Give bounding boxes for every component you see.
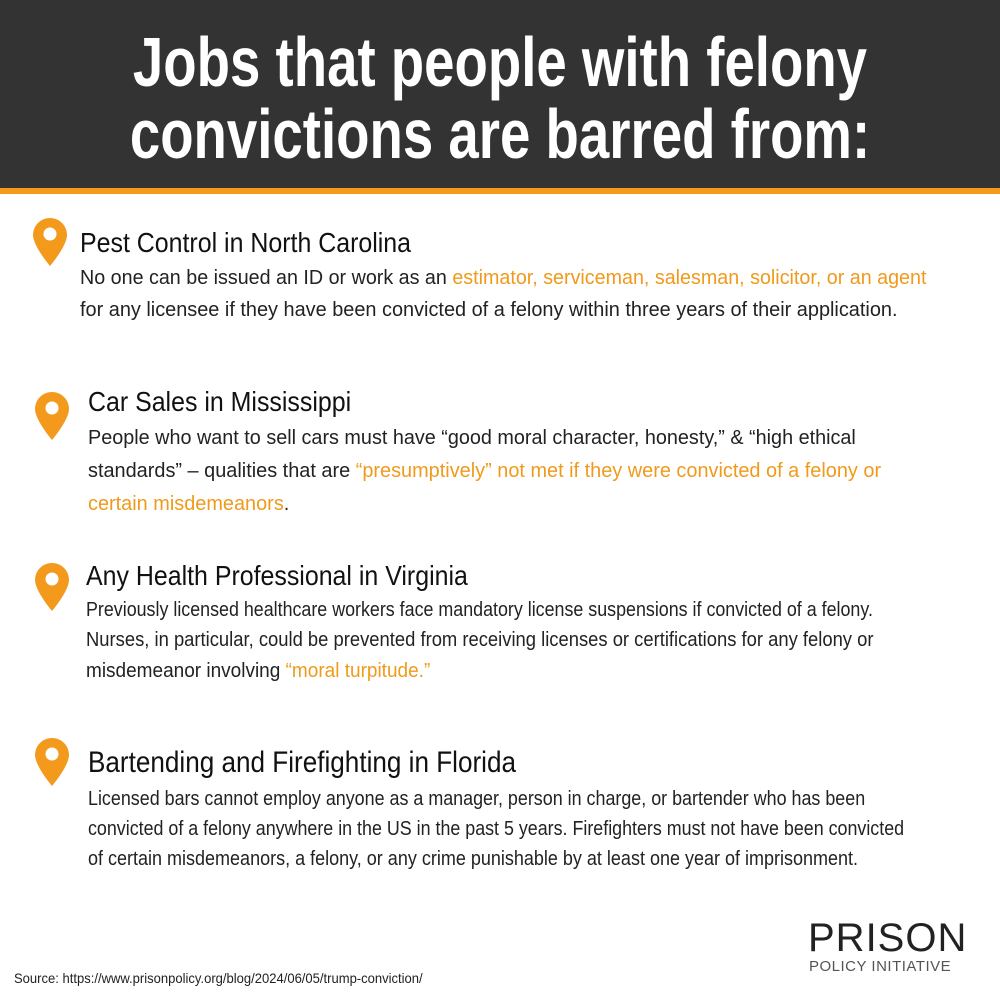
logo: POLICY INITIATIVE (809, 958, 951, 975)
item: car sales: standards” – qualities that are “presumptively” not met if they were convicted of a felony or (88, 460, 881, 482)
item: health professional: Nurses, in particular, could be prevented from receiving licenses or certifications for any felony or (86, 629, 873, 651)
title: Jobs that people with felony (133, 23, 867, 101)
text: No one can be issued an ID or work as an estimator, serviceman, salesman, solicitor, or an agent (80, 267, 926, 289)
heading: Bartending and Firefighting in Florida (88, 746, 516, 779)
item: car sales (35, 386, 881, 515)
source: Source: https://www.prisonpolicy.org/blog/2024/06/05/trump-conviction/ (14, 970, 423, 986)
orange stripe (0, 188, 1000, 194)
title (130, 23, 870, 173)
item: health professional (35, 560, 874, 682)
item: bartending and firefighting (35, 738, 904, 870)
text: Licensed bars cannot employ anyone as a manager, person in charge, or bartender who has been (88, 788, 865, 810)
icon: pin (35, 738, 69, 786)
icon: pin (35, 392, 69, 440)
heading: Pest Control in North Carolina (80, 227, 411, 258)
heading: Any Health Professional in Virginia (86, 560, 468, 591)
heading: Car Sales in Mississippi (88, 386, 351, 417)
text: People who want to sell cars must have “good moral character, honesty,” & “high ethical (88, 427, 856, 449)
title: convictions are barred from: (130, 95, 870, 173)
icon: pin (35, 563, 69, 611)
text: Previously licensed healthcare workers face mandatory license suspensions if convicted of a felony. (86, 599, 873, 621)
item: health professional: misdemeanor involving “moral turpitude.” (86, 660, 430, 682)
header banner (0, 0, 1000, 188)
item: pest control (33, 218, 926, 321)
logo: PRISON (808, 916, 967, 960)
icon: pin (33, 218, 67, 266)
item: bartending and firefighting: of certain misdemeanors, a felony, or any crime punishable by at least one year of imprisonment. (88, 848, 858, 870)
item: pest control: for any licensee if they have been convicted of a felony within three years of their application. (80, 299, 897, 321)
item: car sales: certain misdemeanors. (88, 493, 289, 515)
item: bartending and firefighting: convicted of a felony anywhere in the US in the past 5 years. Firefighters must not have been convicted (88, 818, 904, 840)
